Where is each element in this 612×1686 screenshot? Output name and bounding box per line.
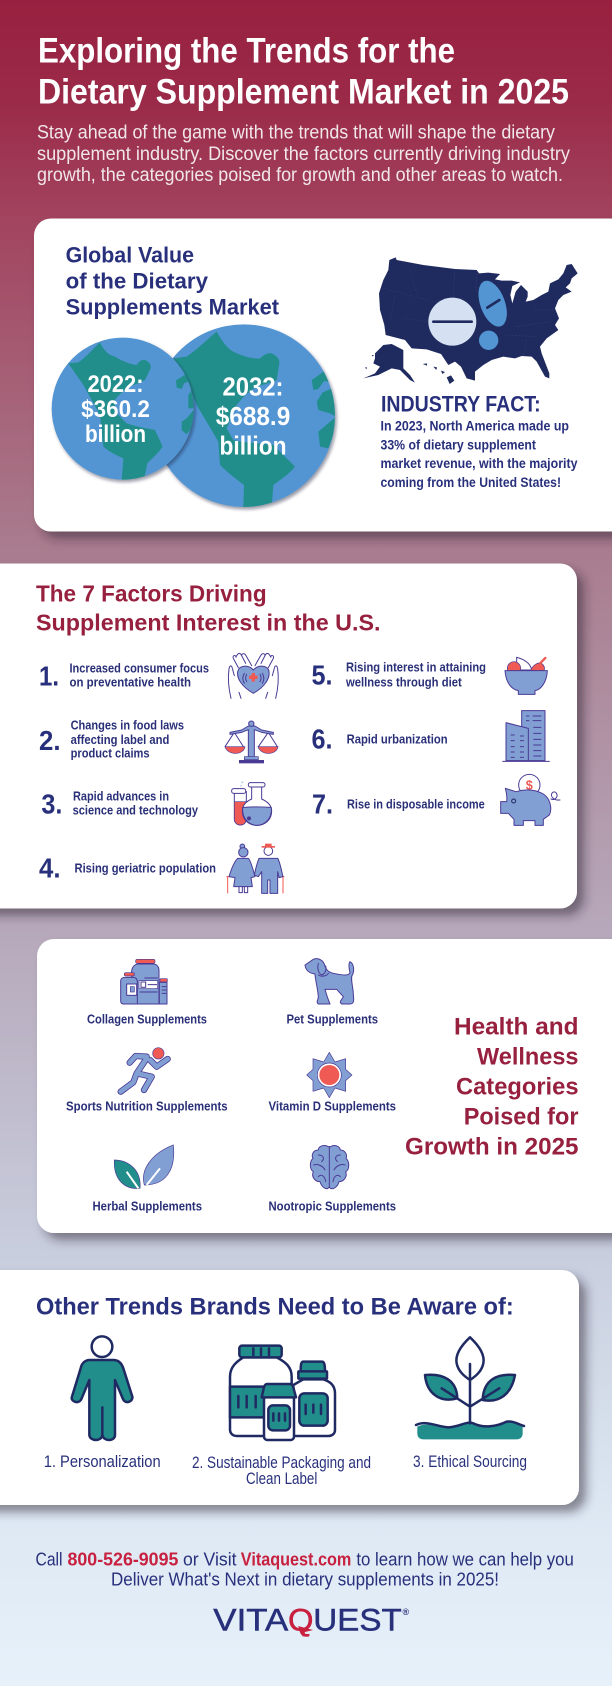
label: 2032 value: 2032:	[222, 372, 284, 402]
factor 7 text: Rise in disposable income	[347, 797, 485, 812]
factor 2 text: Changes in food laws	[71, 717, 184, 732]
heading: categories poised for growth: Growth in 2025	[405, 1133, 578, 1160]
label: herbal: Herbal Supplements	[92, 1199, 202, 1214]
label: sports nutrition: Sports Nutrition Supplements	[66, 1099, 228, 1114]
label: 2032 value	[216, 372, 290, 460]
icon: hands holding heart	[228, 653, 278, 698]
label: 2022 value: $360.2	[81, 396, 150, 423]
globe: 2022	[52, 338, 197, 480]
icon: leaves	[114, 1145, 174, 1189]
heading: seven factors	[36, 581, 380, 636]
call to action: Call	[36, 1550, 62, 1570]
icon: piggy bank	[501, 774, 560, 825]
heading: categories poised for growth: Health and	[454, 1013, 578, 1040]
factor 6 text	[312, 724, 448, 755]
factor 2 text: 2.	[39, 725, 60, 756]
heading: global value: of the Dietary	[66, 269, 208, 294]
logo: vitaquest	[213, 1602, 410, 1638]
heading: other trends: Other Trends Brands Need to Be Aware of:	[36, 1293, 514, 1320]
callout: industry fact: 33% of dietary supplement	[380, 436, 536, 452]
icon: brain	[310, 1146, 349, 1189]
icon: sun	[307, 1052, 352, 1098]
call to action: 800-526-9095	[68, 1550, 178, 1570]
heading: categories poised for growth: Poised for	[464, 1103, 578, 1130]
panel: other trends	[0, 1270, 579, 1505]
callout: industry fact: In 2023, North America made up	[380, 417, 569, 433]
callout: industry fact	[380, 391, 578, 490]
label: pet: Pet Supplements	[286, 1012, 378, 1027]
label: 2032 value: billion	[220, 430, 286, 460]
label: 2022 value: billion	[85, 421, 146, 448]
title: Dietary Supplement Market in 2025	[38, 73, 569, 112]
call to action: to learn how we can help you	[356, 1550, 574, 1570]
icon: buildings	[503, 711, 549, 761]
call to action: Vitaquest.com	[241, 1550, 351, 1570]
factor 3 text	[41, 789, 199, 820]
factor 1 text: 1.	[39, 661, 59, 692]
icon: elderly couple	[226, 844, 284, 893]
factor 6 text: Rapid urbanization	[347, 732, 448, 747]
heading: categories poised for growth	[405, 1013, 578, 1160]
factor 1 text: on preventative health	[70, 675, 191, 690]
label: 2022 value	[81, 371, 150, 448]
callout: industry fact: INDUSTRY FACT:	[381, 391, 541, 416]
label: nootropic: Nootropic Supplements	[268, 1199, 396, 1214]
title: Exploring the Trends for the	[38, 32, 455, 70]
factor 5 text	[312, 659, 486, 690]
title	[38, 32, 569, 112]
icon: food bowl	[505, 657, 547, 694]
panel: global value	[34, 218, 612, 532]
label: sustainable packaging: Clean Label	[246, 1470, 317, 1488]
icon: packaging bottles	[230, 1346, 335, 1440]
logo: vitaquest: ®	[402, 1607, 410, 1617]
icon: runner	[121, 1048, 168, 1092]
icon: test tube and flask	[232, 781, 272, 825]
icon: piggy bank: $	[526, 779, 533, 793]
heading: seven factors: Supplement Interest in the U.S.	[36, 610, 380, 636]
icon: scales	[225, 721, 278, 763]
label: 2022 value: 2022:	[88, 371, 144, 398]
icon: plant	[416, 1337, 524, 1439]
factor 2 text: affecting label and	[71, 732, 169, 747]
icon: person	[72, 1336, 132, 1440]
label: 2032 value: $688.9	[216, 401, 290, 431]
heading: categories poised for growth: Wellness	[477, 1043, 578, 1070]
panel: health and wellness categories	[37, 939, 612, 1233]
factor 7 text	[312, 788, 485, 819]
factor 4 text: 4.	[39, 852, 60, 883]
callout: industry fact: coming from the United States!	[380, 474, 561, 490]
factor 3 text: 3.	[41, 789, 62, 820]
factor 2 text	[39, 717, 184, 760]
logo: vitaquest: UEST	[313, 1602, 402, 1638]
intro text: Stay ahead of the game with the trends that will shape the dietary	[37, 123, 555, 144]
factor 5 text: 5.	[312, 659, 332, 690]
map: united states with pills	[363, 257, 578, 384]
heading: global value	[66, 242, 279, 320]
heading: seven factors: The 7 Factors Driving	[36, 581, 267, 607]
intro text: growth, the categories poised for growth and other areas to watch.	[37, 165, 563, 186]
logo: vitaquest: VITA	[213, 1602, 288, 1638]
factor 7 text: 7.	[312, 788, 333, 819]
factor 4 text: Rising geriatric population	[74, 861, 216, 876]
icon: dog	[305, 959, 354, 1004]
factor 4 text	[39, 852, 216, 883]
label: personalization: 1. Personalization	[44, 1453, 161, 1471]
label: ethical sourcing: 3. Ethical Sourcing	[413, 1453, 527, 1471]
factor 3 text: science and technology	[73, 803, 199, 818]
logo: vitaquest: Q	[288, 1602, 314, 1638]
call to action	[36, 1550, 574, 1590]
panel: seven factors	[0, 564, 577, 908]
factor 2 text: product claims	[71, 745, 150, 760]
icon: collagen bottles	[121, 959, 167, 1004]
callout: industry fact: market revenue, with the majority	[380, 455, 578, 471]
label: collagen: Collagen Supplements	[87, 1012, 207, 1027]
intro text	[37, 123, 570, 186]
label: sustainable packaging	[192, 1454, 371, 1488]
heading: global value: Supplements Market	[66, 295, 279, 320]
label: sustainable packaging: 2. Sustainable Packaging and	[192, 1454, 371, 1472]
factor 1 text: Increased consumer focus	[70, 661, 209, 676]
label: vitamin d: Vitamin D Supplements	[268, 1099, 396, 1114]
heading: global value: Global Value	[66, 242, 194, 268]
globe: 2032	[152, 324, 337, 508]
factor 5 text: wellness through diet	[345, 675, 462, 690]
call to action: or Visit	[183, 1550, 236, 1570]
heading: categories poised for growth: Categories	[456, 1073, 578, 1100]
factor 3 text: Rapid advances in	[73, 789, 169, 804]
factor 5 text: Rising interest in attaining	[346, 660, 486, 675]
call to action: Deliver What's Next in dietary supplements in 2025!	[111, 1570, 499, 1590]
intro text: supplement industry. Discover the factors currently driving industry	[37, 144, 570, 165]
factor 1 text	[39, 661, 209, 692]
factor 6 text: 6.	[312, 724, 332, 755]
